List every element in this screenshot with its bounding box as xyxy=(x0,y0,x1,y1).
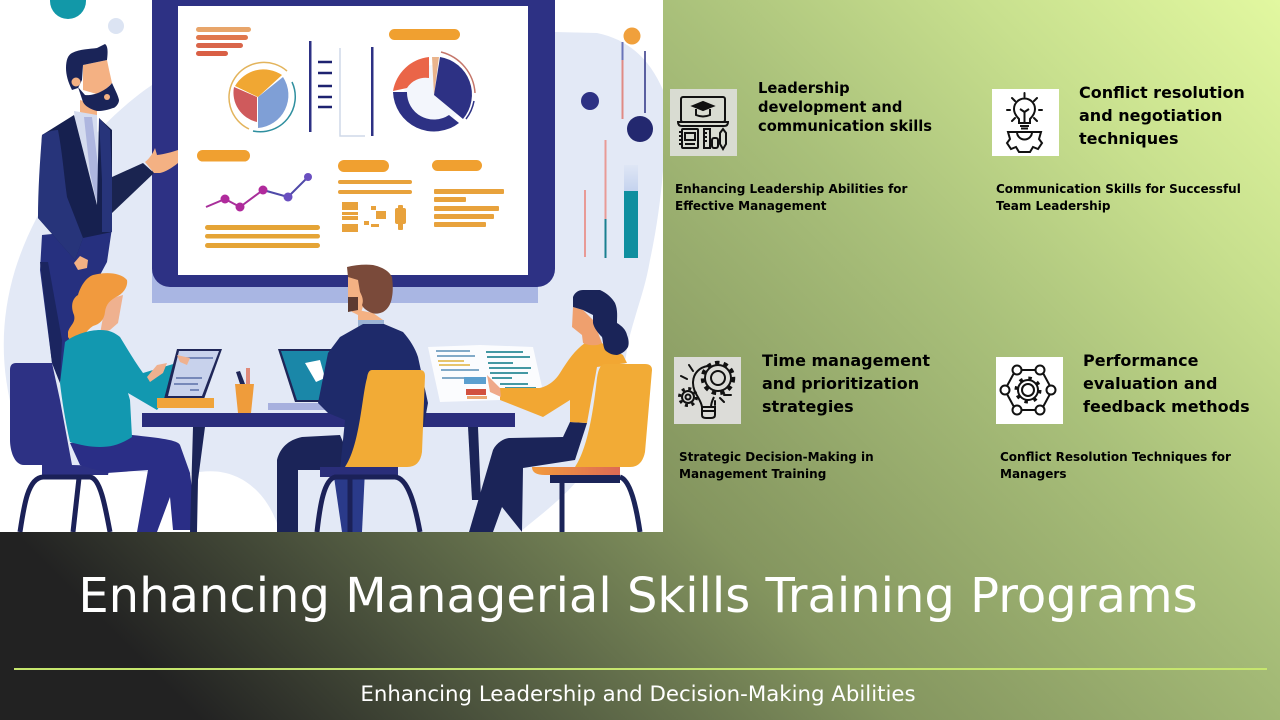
presentation board xyxy=(152,0,555,303)
heading xyxy=(762,351,930,416)
right chair xyxy=(532,364,652,532)
heading: evaluation and xyxy=(1083,374,1217,393)
heading: feedback methods xyxy=(1083,397,1250,416)
description: Managers xyxy=(1000,467,1066,481)
description: Management Training xyxy=(679,467,826,481)
heading xyxy=(1079,83,1245,148)
icon: gear in hexagon network xyxy=(996,357,1063,424)
line chart panel xyxy=(197,150,320,248)
table xyxy=(142,413,515,532)
description xyxy=(675,182,908,213)
icon: light bulb on gear xyxy=(992,89,1059,156)
heading: techniques xyxy=(1079,129,1178,148)
heading: Time management xyxy=(762,351,930,370)
illustration: team meeting in front of a dashboard board xyxy=(0,0,663,532)
heading: Conflict resolution xyxy=(1079,83,1245,102)
description xyxy=(1000,450,1231,481)
description: Conflict Resolution Techniques for xyxy=(1000,450,1231,464)
item 2: conflict resolution xyxy=(992,83,1245,213)
open report on table xyxy=(428,345,542,402)
description: Communication Skills for Successful xyxy=(996,182,1241,196)
heading: and negotiation xyxy=(1079,106,1222,125)
icon: bulb with gears xyxy=(674,357,741,424)
description: Enhancing Leadership Abilities for xyxy=(675,182,907,196)
background blob xyxy=(4,32,665,532)
pie chart xyxy=(229,62,295,132)
decorative elements right of board xyxy=(581,28,653,258)
heading: Leadership xyxy=(758,80,850,97)
description xyxy=(679,450,874,481)
heading: development and xyxy=(758,99,902,116)
yellow chair back xyxy=(317,370,425,532)
subtitle: Enhancing Leadership and Decision-Making Abilities xyxy=(360,682,916,707)
woman with laptop xyxy=(60,273,222,532)
donut chart xyxy=(389,29,475,132)
item 4: performance evaluation xyxy=(996,351,1250,481)
heading: communication skills xyxy=(758,118,932,135)
description: Effective Management xyxy=(675,199,826,213)
woman seated on yellow chair xyxy=(469,290,652,532)
heading: and prioritization xyxy=(762,374,919,393)
stacked bars top left xyxy=(196,27,251,56)
description xyxy=(996,182,1241,213)
presenter xyxy=(38,44,178,383)
pencil cup xyxy=(235,368,254,413)
left chair xyxy=(10,363,110,532)
heading: Performance xyxy=(1083,351,1199,370)
heading xyxy=(1083,351,1250,416)
divider xyxy=(14,668,1267,670)
heading xyxy=(758,80,932,135)
icon: laptop with graduation cap and stationery xyxy=(670,89,737,156)
item 3: time management xyxy=(674,351,930,481)
description: Team Leadership xyxy=(996,199,1110,213)
description: Strategic Decision-Making in xyxy=(679,450,874,464)
legend lines xyxy=(309,41,374,136)
tablet laptop xyxy=(147,349,222,408)
man seated on yellow chair xyxy=(277,265,428,532)
heading: strategies xyxy=(762,397,854,416)
decorative circles top left xyxy=(50,0,124,34)
mini blocks panel xyxy=(338,160,412,232)
title: Enhancing Managerial Skills Training Programs xyxy=(78,568,1198,624)
item 1: leadership development xyxy=(670,80,932,213)
second laptop xyxy=(268,349,344,410)
text bars panel xyxy=(432,160,504,227)
